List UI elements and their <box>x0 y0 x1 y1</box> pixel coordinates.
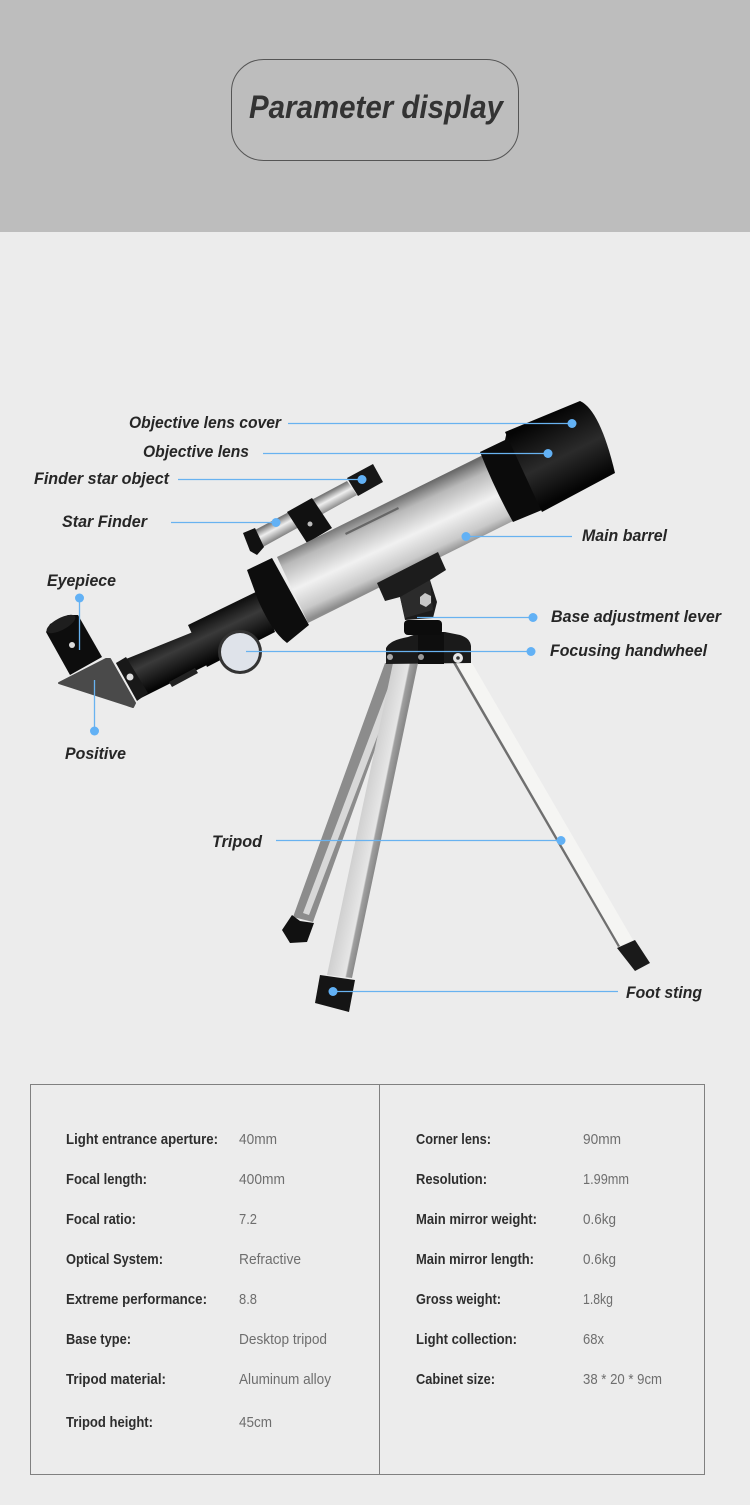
callout: objective lens cover <box>129 413 576 432</box>
eyepiece and prism <box>44 611 207 707</box>
callout: star finder: Star Finder <box>62 512 148 531</box>
callout: finder star object <box>34 469 366 488</box>
left column specs: Base type: <box>66 1331 131 1348</box>
callout: foot sting <box>328 983 703 1002</box>
left column specs: Light entrance aperture: <box>66 1131 218 1148</box>
callout: eyepiece: Eyepiece <box>47 571 116 590</box>
callout: finder star object: Finder star object <box>34 469 170 488</box>
callout: star finder <box>62 512 280 531</box>
tripod hub <box>386 620 471 664</box>
left column specs: Tripod material: <box>66 1371 166 1388</box>
title badge: Parameter display <box>249 89 505 125</box>
telescope illustration <box>44 401 650 1012</box>
right column specs: Gross weight: <box>416 1291 501 1308</box>
tripod legs <box>282 663 650 1012</box>
callout: tripod: Tripod <box>212 832 263 851</box>
focuser body <box>188 590 275 674</box>
right column specs: Corner lens: <box>416 1131 491 1148</box>
callout: eyepiece <box>47 571 116 650</box>
left column specs: 7.2 <box>239 1211 257 1228</box>
left column specs: 45cm <box>239 1414 272 1431</box>
callout: objective lens cover: Objective lens cover <box>129 413 282 432</box>
right column specs: 0.6kg <box>583 1251 616 1268</box>
left column specs: Refractive <box>239 1251 301 1268</box>
right column specs: Light collection: <box>416 1331 517 1348</box>
right column specs: 68x <box>583 1331 604 1348</box>
right column specs: 90mm <box>583 1131 621 1148</box>
left column specs: Focal length: <box>66 1171 147 1188</box>
left column specs: 40mm <box>239 1131 277 1148</box>
left column specs: Aluminum alloy <box>239 1371 331 1388</box>
callout: base adjustment lever: Base adjustment lever <box>551 607 722 626</box>
header band <box>0 0 750 232</box>
callout: tripod <box>212 832 566 851</box>
callout: base adjustment lever <box>417 607 722 626</box>
right column specs: Cabinet size: <box>416 1371 495 1388</box>
finder scope <box>243 464 383 555</box>
callout: foot sting: Foot sting <box>626 983 703 1002</box>
left column specs: Tripod height: <box>66 1414 153 1431</box>
left column specs: Focal ratio: <box>66 1211 136 1228</box>
right column specs: 1.99mm <box>583 1171 629 1188</box>
right column specs: 38 * 20 * 9cm <box>583 1371 662 1388</box>
left column specs <box>66 1131 331 1431</box>
right column specs: Resolution: <box>416 1171 487 1188</box>
title badge <box>232 60 518 160</box>
right column specs <box>416 1131 662 1388</box>
left column specs: 400mm <box>239 1171 285 1188</box>
mount bracket <box>377 552 446 620</box>
left column specs: Desktop tripod <box>239 1331 327 1348</box>
right column specs: Main mirror weight: <box>416 1211 537 1228</box>
left column specs: 8.8 <box>239 1291 257 1308</box>
callout: main barrel <box>462 526 668 545</box>
right column specs: Main mirror length: <box>416 1251 534 1268</box>
specification table <box>30 1084 704 1475</box>
callout: focusing handwheel <box>246 641 708 660</box>
left column specs: Optical System: <box>66 1251 163 1268</box>
callout: positive: Positive <box>65 744 126 763</box>
callout: positive <box>65 680 126 763</box>
callout: main barrel: Main barrel <box>582 526 668 545</box>
left column specs: Extreme performance: <box>66 1291 207 1308</box>
callout: focusing handwheel: Focusing handwheel <box>550 641 708 660</box>
right column specs: 0.6kg <box>583 1211 616 1228</box>
callout: objective lens <box>143 442 552 461</box>
right column specs: 1.8kg <box>583 1291 613 1308</box>
callout: objective lens: Objective lens <box>143 442 249 461</box>
main barrel <box>247 401 615 643</box>
